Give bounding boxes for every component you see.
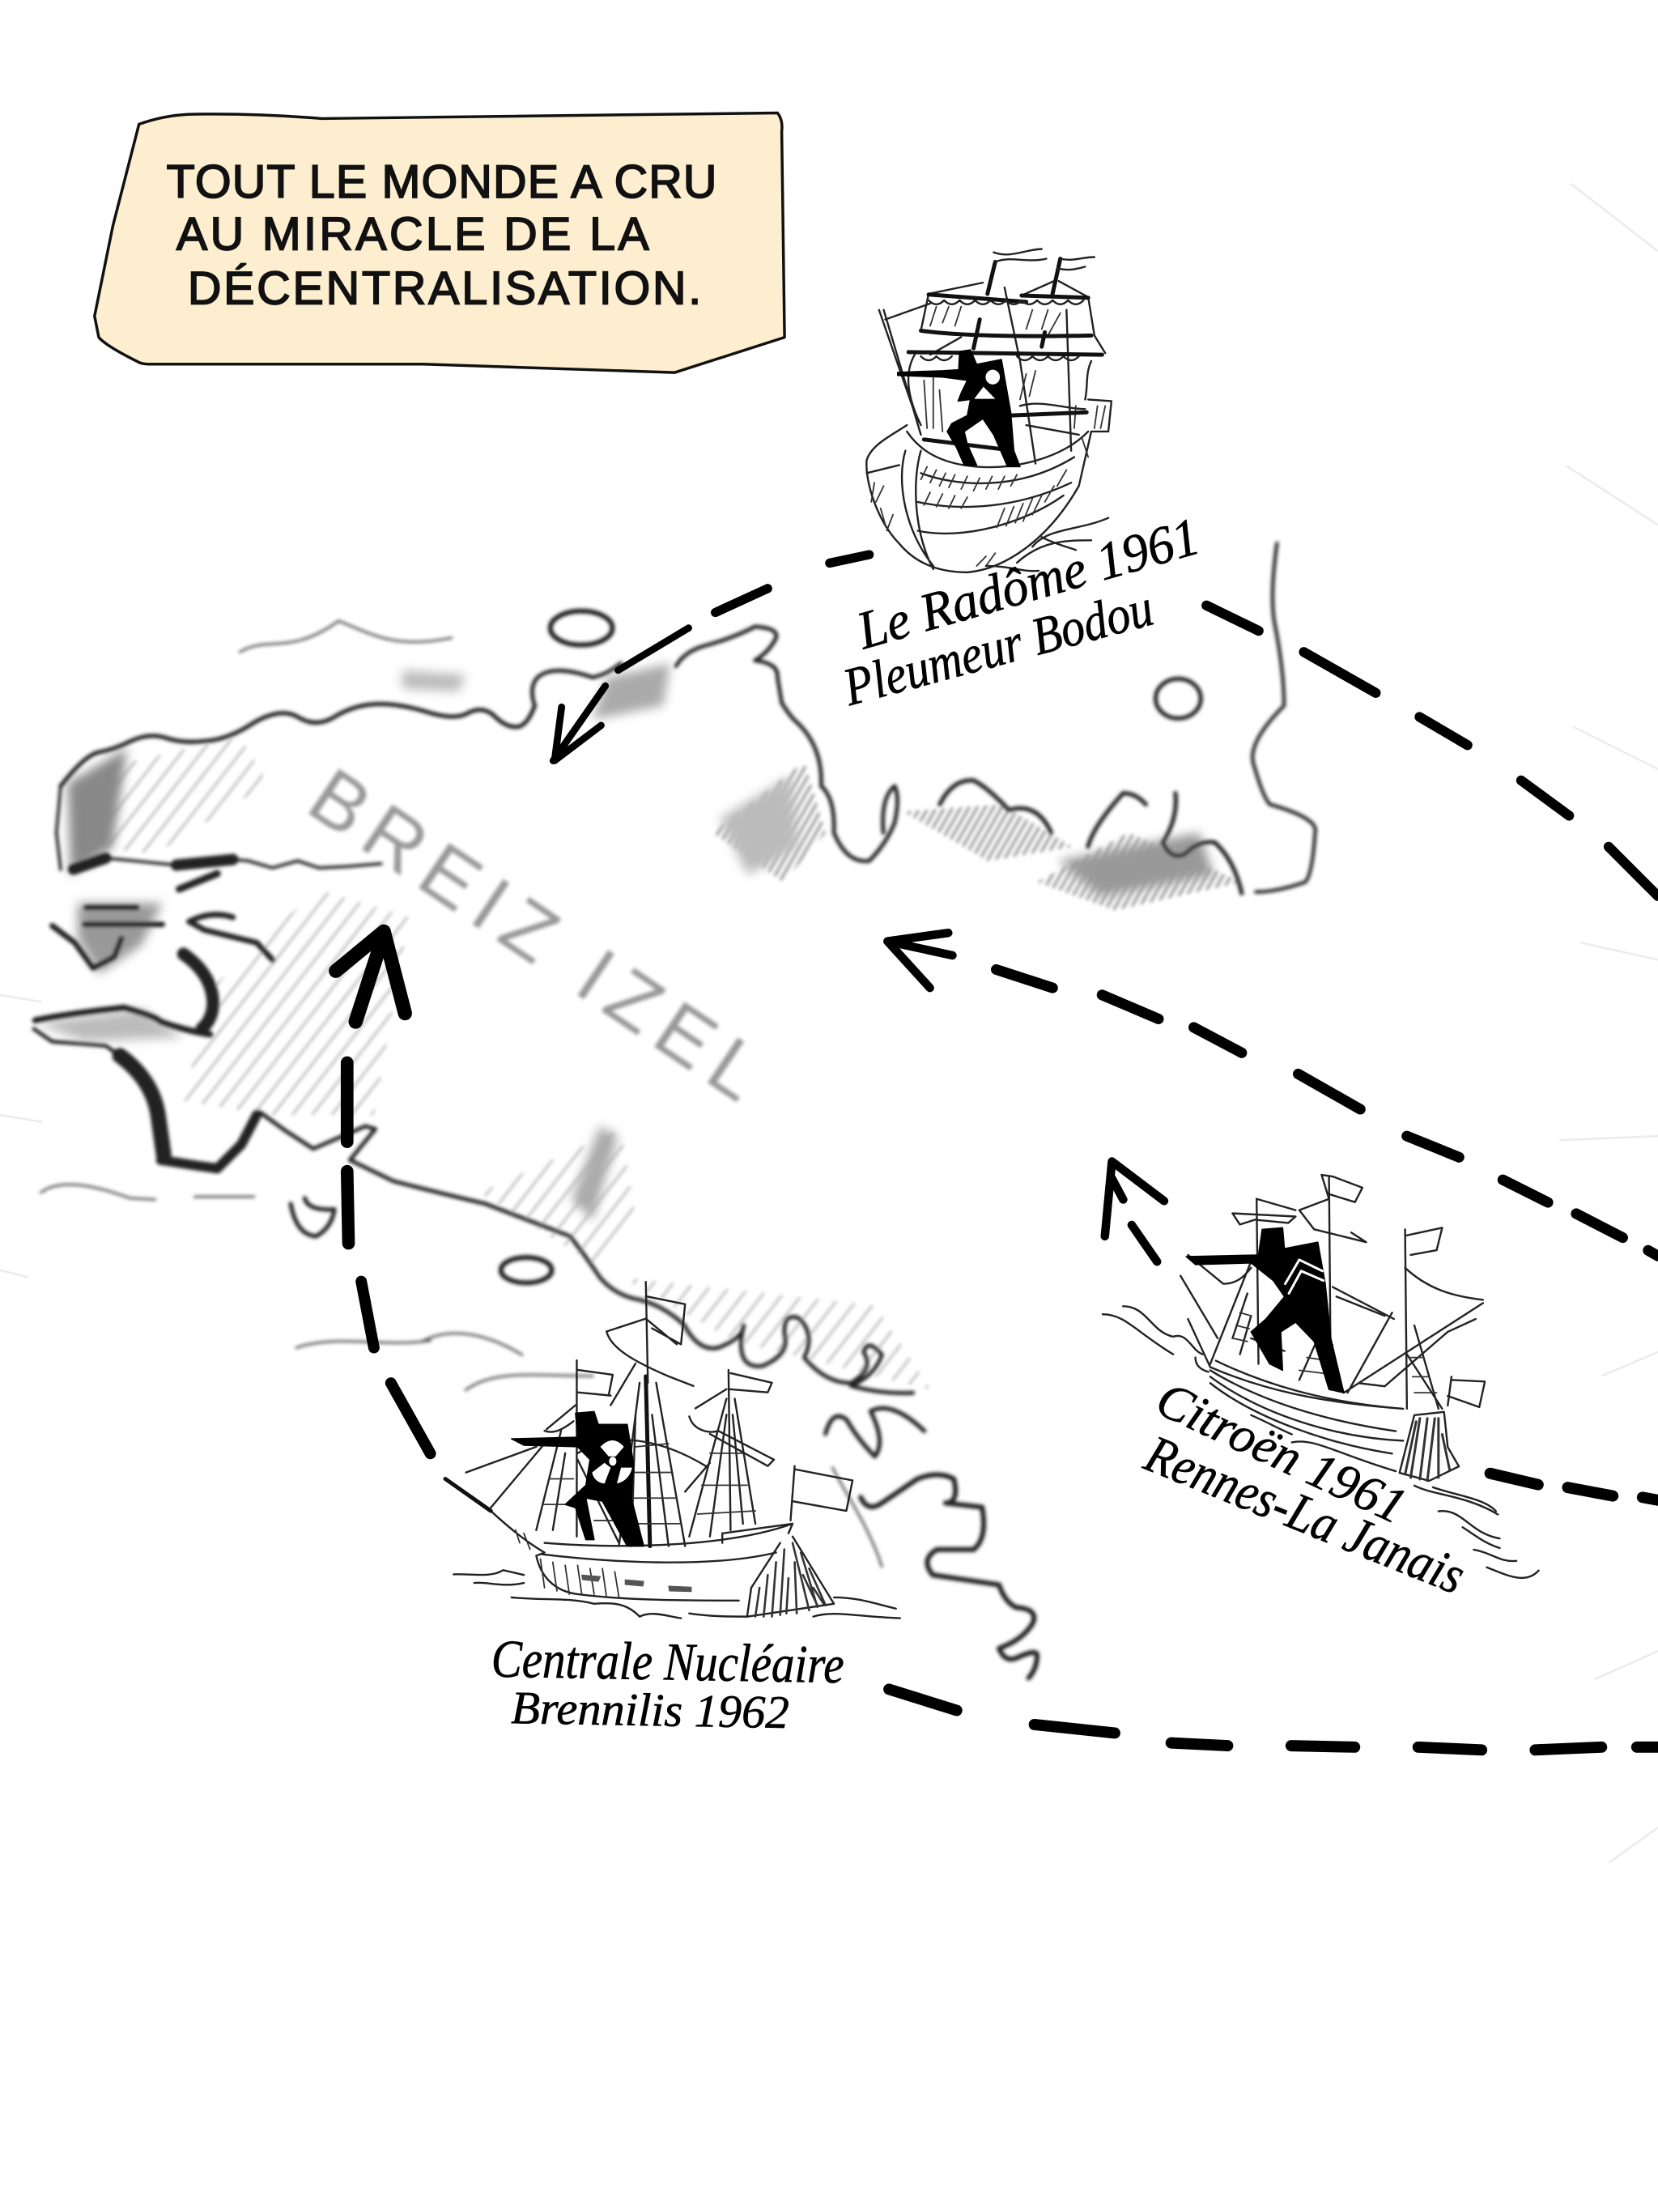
caption: Citroën 1961: Citroën 1961 [1148, 1370, 1415, 1535]
south coast [120, 1056, 164, 1155]
caption: Brennilis 1962: Brennilis 1962 [511, 1682, 789, 1738]
rigging and sails [879, 281, 1112, 463]
gun ports [582, 1575, 691, 1592]
islands [291, 611, 1201, 1283]
shrouds and ratlines [536, 1383, 755, 1546]
gulf of Morbihan and Loire coast [826, 1408, 925, 1457]
dashed route: centre [887, 933, 1658, 1256]
sea waves [41, 621, 882, 1567]
caption: Centrale Nucléaire: Centrale Nucléaire [491, 1630, 844, 1695]
west coast [74, 858, 233, 870]
ship: Citroën [1103, 1175, 1539, 1578]
silhouette with radar badge [898, 350, 1020, 466]
silhouette with chevrons badge [1186, 1227, 1344, 1393]
masts [445, 1376, 650, 1546]
waves [986, 518, 1108, 571]
map of Brittany [34, 543, 1316, 1678]
thick yards and masts [908, 258, 1102, 355]
hull [1188, 1319, 1403, 1453]
north coast [61, 704, 535, 786]
scalloped sail edges [920, 300, 1083, 360]
Crozon peninsula [52, 908, 272, 968]
flags [1256, 1175, 1485, 1407]
callout text: AU MIRACLE DE LA [176, 209, 649, 261]
silhouette with radiation badge [512, 1411, 644, 1546]
hull [491, 1511, 793, 1601]
hull hatching [871, 466, 1066, 566]
arrow to Rennes [1105, 1161, 1164, 1236]
arrow to centre of map [887, 933, 953, 988]
eastern border [1252, 543, 1316, 892]
caption: Le Radôme 1961: Le Radôme 1961 [850, 507, 1206, 661]
callout text: DÉCENTRALISATION. [188, 263, 701, 315]
callout text [167, 156, 716, 315]
arrow to north coast [553, 628, 689, 760]
stern [1400, 1412, 1459, 1481]
grey smudges [36, 663, 1214, 1221]
hull hatching [516, 1530, 619, 1597]
ship: Centrale Nucléaire [445, 1282, 900, 1619]
caption: Rennes-La Janais: Rennes-La Janais [1137, 1424, 1473, 1606]
callout box [95, 113, 784, 372]
ship: Le Radôme [866, 249, 1112, 572]
map hatching [85, 737, 1242, 1390]
dashed route: Radôme [553, 555, 1658, 896]
callout: caption box [95, 113, 784, 372]
dashed route: Brennilis [336, 931, 1658, 1750]
hull [866, 425, 1091, 572]
arrow to Finistère [336, 931, 405, 1022]
caption: Pleumeur Bodou: Pleumeur Bodou [836, 578, 1159, 717]
map label: Breiz Izel: BREIZ IZEL [294, 751, 778, 1117]
dashed route: Citroën [1105, 1161, 1658, 1500]
masts and rigging [1180, 1176, 1483, 1409]
faint background rays [0, 184, 1658, 1863]
waves [453, 1570, 900, 1619]
sails and flags [545, 1296, 852, 1521]
callout text: TOUT LE MONDE A CRU [167, 156, 716, 208]
flags [993, 249, 1095, 270]
stern [747, 1537, 834, 1617]
waves [1103, 1306, 1539, 1578]
